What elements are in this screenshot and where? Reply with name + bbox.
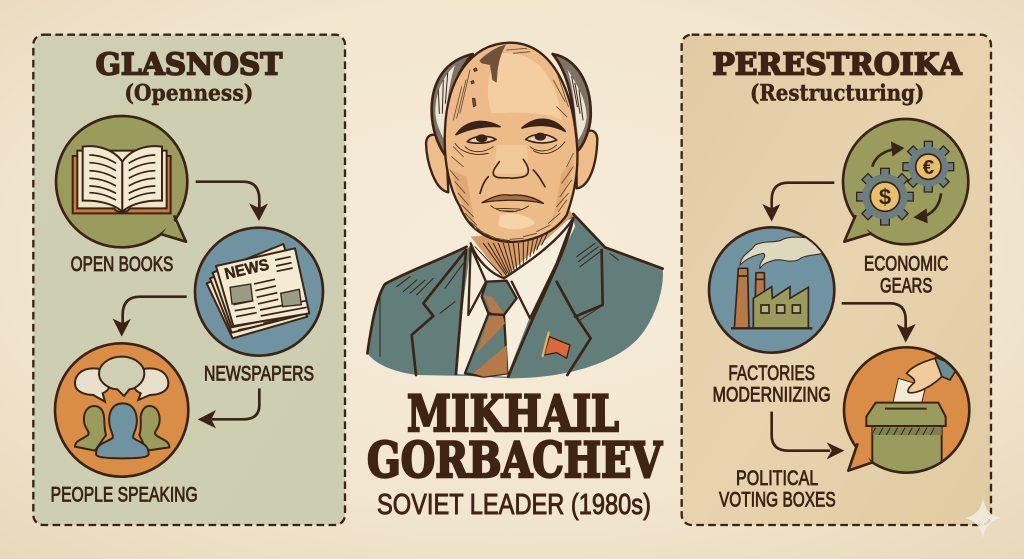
forelock	[479, 45, 506, 83]
face	[445, 43, 577, 242]
name: gorbachev: GORBACHEV	[367, 431, 663, 489]
label: political voting boxes	[719, 466, 836, 512]
jaw stubble	[462, 200, 567, 241]
icon: open book speech bubble	[56, 116, 187, 247]
label: factories modernizing: FACTORIES	[728, 361, 815, 385]
icon: factory	[709, 227, 835, 353]
arrow: books to newspapers	[196, 182, 268, 221]
tie	[465, 281, 517, 377]
suit jacket	[367, 214, 663, 378]
panel: perestroika	[682, 35, 991, 525]
label: economic gears: ECONOMIC	[864, 252, 948, 276]
label: open books: OPEN BOOKS	[71, 252, 173, 276]
subtitle: soviet leader: SOVIET LEADER (1980s)	[377, 489, 651, 521]
nose	[480, 159, 545, 193]
arrow: newspapers label to people	[198, 388, 259, 428]
label: political voting boxes: VOTING BOXES	[719, 488, 836, 512]
label: economic gears: GEARS	[880, 273, 932, 297]
neck	[471, 207, 573, 278]
arrow: newspapers to people	[113, 297, 187, 337]
icon: newspaper: NEWS	[223, 256, 271, 283]
mouth	[482, 195, 543, 203]
icon: economic gears speech bubble: $	[879, 185, 891, 210]
facial hatching	[450, 48, 573, 207]
name: mikhail: MIKHAIL	[407, 384, 619, 443]
icon: voting box speech bubble	[844, 347, 969, 477]
pin: red flag	[543, 333, 570, 358]
label: newspapers: NEWSPAPERS	[204, 362, 314, 386]
panel: glasnost	[33, 35, 345, 525]
eyebrows	[456, 119, 565, 135]
arrow: factories label to voting box	[772, 412, 844, 459]
arrow: gears to factories	[762, 183, 834, 222]
label: political voting boxes: POLITICAL	[736, 466, 818, 490]
heading: glasnost: GLASNOST	[96, 47, 282, 82]
portrait: mikhail gorbachev	[367, 43, 663, 378]
subheading: openness: (Openness)	[124, 81, 253, 107]
label: economic gears	[864, 252, 948, 297]
jacket lapels	[367, 214, 663, 377]
label: factories modernizing: MODERNIIZING	[713, 383, 831, 407]
icon: people speaking	[55, 343, 188, 477]
eyes	[467, 134, 557, 143]
collar	[468, 218, 573, 318]
icon: sparkle watermark	[965, 498, 1001, 538]
heading: perestroika: PERESTROIKA	[712, 47, 962, 82]
icon: economic gears speech bubble	[843, 119, 968, 244]
icon: economic gears speech bubble: €	[923, 156, 935, 179]
icon: newspaper	[195, 228, 323, 356]
ears	[426, 135, 448, 192]
hair	[432, 54, 473, 155]
subheading: restructuring: (Restructuring)	[750, 81, 924, 107]
title: mikhail gorbachev	[367, 384, 663, 489]
arrow: factories to voting box	[842, 303, 916, 343]
label: factories modernizing	[713, 361, 831, 407]
label: people speaking: PEOPLE SPEAKING	[51, 483, 198, 507]
shirt	[456, 218, 575, 377]
